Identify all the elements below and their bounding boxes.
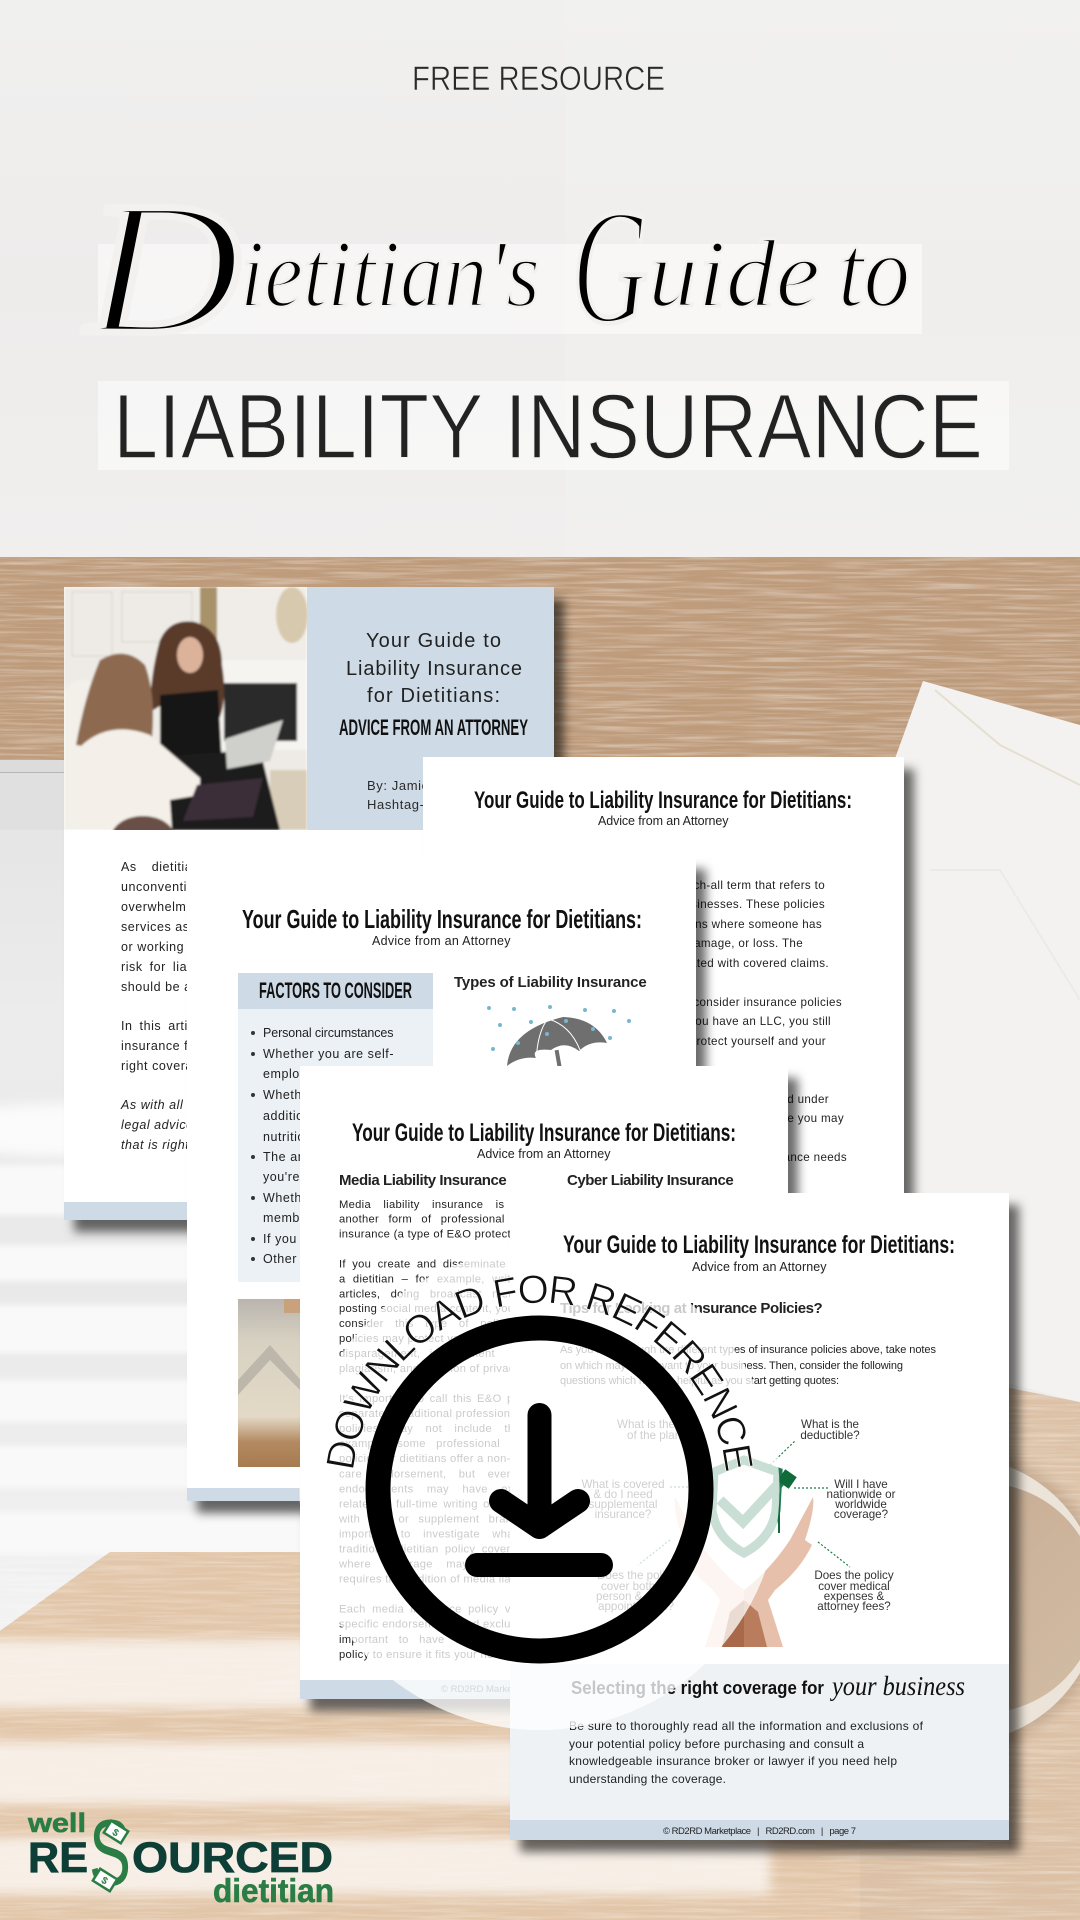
page 4 footer <box>300 1680 788 1699</box>
question callouts around the shield: Will I have <box>834 1478 888 1491</box>
panel: page 3 factors to consider <box>187 857 696 1501</box>
factors bullet list: If you <box>263 1232 297 1246</box>
question callouts around the shield: Does the policy <box>814 1569 894 1582</box>
page 2 body text: associated with covered claims. <box>655 957 829 970</box>
media liability column: traditional dietitian policy covers, <box>339 1544 520 1556</box>
logo: well resourced dietitian: RE <box>28 1834 88 1882</box>
question callouts around the shield: & do I need <box>593 1488 653 1501</box>
media liability column: disparagement, infringement <box>339 1348 495 1360</box>
page 1 intro text: In this article <box>121 1019 205 1033</box>
page 4 heading <box>352 1119 736 1161</box>
page 2 body text: damage, or loss. The <box>687 937 803 950</box>
factors bullet list: additional <box>263 1109 322 1123</box>
tips intro text: questions which may be helpful as you start getting quotes: <box>560 1375 839 1387</box>
media liability column: where coverage may be lacking <box>338 1559 545 1571</box>
tips intro text: on which may be relevant to your business. Then, consider the following <box>560 1360 903 1372</box>
media liability column: related to full-time writing or <box>339 1499 494 1511</box>
cyber liability heading: Cyber Liability Insurance <box>567 1172 734 1189</box>
media liability column: important to investigate what <box>339 1529 518 1541</box>
factors heading: FACTORS TO CONSIDER <box>259 978 412 1003</box>
media liability column: Media Liability Insurance <box>339 1172 507 1189</box>
page 3 heading <box>242 904 642 948</box>
media liability column: insurance (a type of E&O protection) <box>339 1228 531 1240</box>
page 2 body text: situations where someone has <box>656 918 822 931</box>
curved label: download for reference: DOWNLOAD FOR REFERENCE <box>326 1276 754 1472</box>
page 1 intro text: insurance for <box>121 1039 200 1053</box>
page 5 footer <box>510 1820 1009 1840</box>
question callouts around the shield: nationwide or <box>827 1488 896 1501</box>
cover byline: By: Jamie <box>367 778 429 793</box>
page 2 body text: insurance needs <box>757 1151 847 1164</box>
label: free resource: FREE RESOURCE <box>412 60 665 98</box>
media liability column: policies may not include this. <box>339 1423 526 1435</box>
icon: bottom banknote: $ <box>99 1875 110 1888</box>
title block <box>83 60 1009 478</box>
question callouts around the shield: insurance? <box>595 1508 652 1521</box>
factors bullet list <box>251 1026 394 1266</box>
coverage body text: understanding the coverage. <box>569 1772 726 1786</box>
factors bullet list: Whether you are self- <box>263 1047 394 1061</box>
page 5 heading: Advice from an Attorney <box>692 1260 827 1274</box>
page 1 intro text: As dietitians <box>121 860 207 874</box>
page 2 body text: e you may <box>787 1112 844 1125</box>
title script: Dietitian's Guide to: ietitian's <box>240 221 540 327</box>
factors bullet list: Whether <box>263 1088 314 1102</box>
photo: two women consulting <box>64 587 307 830</box>
page 3 footer band <box>187 1488 696 1501</box>
question callouts around the shield: expenses & <box>824 1590 885 1603</box>
media liability column: with and or supplement brand <box>338 1514 519 1526</box>
coverage body text: knowledgeable insurance broker or lawyer if you need help <box>569 1754 897 1768</box>
media liability column: separately; traditional professional <box>339 1408 520 1420</box>
media liability column: plagiarism, and invasion of privacy. <box>339 1363 523 1375</box>
page 2 heading <box>474 787 852 828</box>
media liability column: requires the addition of media liability <box>339 1574 535 1586</box>
icon: bottom banknote <box>93 1869 117 1891</box>
question callouts around the shield: cover both <box>601 1580 655 1593</box>
tips intro text <box>560 1344 936 1387</box>
page 1 intro text: should be at <box>121 980 196 994</box>
coverage heading <box>571 1671 965 1701</box>
page 1 intro text: risk for liability <box>121 960 216 974</box>
media liability column: policies may protect you <box>339 1333 466 1345</box>
page 1 intro text: that is right for <box>121 1138 210 1152</box>
icon: umbrella in rain <box>487 1005 631 1068</box>
coverage heading: Selecting the right coverage for <box>571 1678 824 1698</box>
media liability column: another form of professional liability <box>339 1214 550 1226</box>
icon: top banknote: $ <box>110 1827 121 1840</box>
page 2 body text: protect yourself and your <box>690 1035 826 1048</box>
cover title text: Your Guide to <box>366 630 501 652</box>
page 4 footer: © RD2RD Marketplace <box>441 1684 538 1695</box>
page 2 body text <box>655 879 847 1164</box>
title script: Dietitian's Guide to: G <box>572 175 648 358</box>
page 2 body text: you have an LLC, you still <box>689 1015 831 1028</box>
page 1 intro text: right coverage <box>121 1059 208 1073</box>
media liability column: consider this type of policy. <box>339 1318 513 1330</box>
translucent white disc behind download icon <box>300 1250 780 1730</box>
illustration: hands holding shield <box>675 1460 813 1647</box>
title script: Dietitian's Guide to: uide <box>648 221 820 327</box>
media liability column: articles, doing broadcast media, <box>339 1289 528 1301</box>
media liability column: a dietitian – for example, writing <box>339 1274 527 1286</box>
media liability column: endorsements may have exclusions <box>339 1484 557 1496</box>
panel: page 4 media and cyber liability <box>300 1066 788 1699</box>
question callouts around the shield: supplemental <box>589 1498 657 1511</box>
cover byline <box>367 778 459 812</box>
icon: top banknote <box>104 1821 128 1843</box>
media liability column: If you create and disseminate content <box>339 1258 552 1270</box>
page 2 body text: d under <box>787 1093 829 1106</box>
page 4 heading: Your Guide to Liability Insurance for Dietitians: <box>352 1119 736 1147</box>
question callouts around the shield: appointments? <box>598 1600 675 1613</box>
title script: Dietitian's Guide to: D <box>83 164 241 374</box>
question callouts around the shield: cover medical <box>818 1580 890 1593</box>
question callouts around the shield: deductible? <box>800 1429 860 1442</box>
tips heading: Tips for Looking at Insurance Policies? <box>560 1300 823 1317</box>
coverage body text <box>569 1719 924 1786</box>
page 5 footer: © RD2RD Marketplace | RD2RD.com | page 7 <box>663 1826 856 1837</box>
title: LIABILITY INSURANCE: LIABILITY INSURANCE <box>113 376 983 478</box>
page 1 intro text: services as a <box>121 920 201 934</box>
media liability column: posting social media content, you should <box>339 1303 553 1315</box>
page 2 body text: businesses. These policies <box>678 898 825 911</box>
question callouts around the shield <box>581 1418 896 1613</box>
page 3 heading: Advice from an Attorney <box>372 934 511 948</box>
photo: paper and desk <box>238 1299 310 1467</box>
question callouts around the shield: coverage? <box>834 1508 889 1521</box>
page 1 footer band <box>64 1202 554 1220</box>
media liability column: specific endorsements and exclusions <box>339 1619 538 1631</box>
logo: well resourced dietitian <box>27 1800 334 1909</box>
page 2 heading: Your Guide to Liability Insurance for Dietitians: <box>474 787 852 814</box>
page 3 heading: Your Guide to Liability Insurance for Dietitians: <box>242 904 642 934</box>
page 2 heading: Advice from an Attorney <box>598 814 729 828</box>
media liability column: policy to ensure it fits your needs. <box>339 1649 516 1661</box>
panel: page 5 tips for insurance policies <box>510 1193 1009 1840</box>
title script backdrop <box>98 244 922 334</box>
cover byline: Hashtag-Legal <box>367 797 459 812</box>
media liability column: care endorsement, but even <box>339 1468 513 1480</box>
tips intro text: As you look through the different types of insurance policies above, take notes <box>560 1344 936 1356</box>
panel: blue cover title <box>307 587 554 830</box>
page 1 intro text: overwhelming <box>121 900 205 914</box>
page 1 intro text: legal advice. <box>121 1118 198 1132</box>
logo: well resourced dietitian: OURCED <box>132 1834 333 1882</box>
coverage body text: Be sure to thoroughly read all the information and exclusions of <box>569 1719 924 1733</box>
factors bullet list: Other <box>263 1252 297 1266</box>
media liability column: policies for dietitians offer a non-patient <box>339 1453 547 1465</box>
icon: download arrow in circle <box>378 1328 701 1651</box>
factors bullet list: employed <box>263 1067 322 1081</box>
page 1 intro text: or working at <box>121 940 200 954</box>
cover title text: Liability Insurance <box>346 658 522 680</box>
page 5 heading <box>563 1231 955 1274</box>
factors bullet list: nutrition <box>263 1130 312 1144</box>
page 1 intro text <box>120 860 216 1152</box>
page 4 heading: Advice from an Attorney <box>477 1147 611 1161</box>
factors bullet list: you're <box>263 1170 300 1184</box>
question callouts around the shield: attorney fees? <box>817 1600 891 1613</box>
question callouts around the shield: Does the policy <box>597 1569 676 1582</box>
question callouts around the shield: person & <box>596 1590 643 1603</box>
question callouts around the shield: worldwide <box>834 1498 887 1511</box>
media liability column: Each media insurance policy varies <box>339 1604 537 1616</box>
title script: Dietitian's Guide to <box>83 164 910 374</box>
question callouts around the shield: What is covered <box>581 1478 665 1491</box>
media liability column: It's important to call this E&O policy <box>339 1393 537 1405</box>
cover title text: ADVICE FROM AN ATTORNEY <box>339 715 528 740</box>
question callouts around the shield: What is the <box>801 1418 859 1431</box>
page 1 intro text: unconventional <box>121 880 213 894</box>
logo: well resourced dietitian: S <box>89 1800 131 1905</box>
panel: page 1 guide cover <box>64 587 554 1220</box>
factors bullet list: The amount <box>263 1150 335 1164</box>
dotted arrows <box>638 1441 850 1567</box>
page 2 body text: a catch-all term that refers to <box>667 879 825 892</box>
coverage heading: your business <box>829 1671 965 1701</box>
media liability column <box>338 1172 557 1661</box>
factors bullet list: Whether <box>263 1191 314 1205</box>
question callouts around the shield: What is the cost <box>617 1418 700 1431</box>
media liability column: Media liability insurance is actually <box>339 1199 557 1211</box>
page 1 intro text: As with all a <box>120 1098 195 1112</box>
coverage body text: your potential policy before purchasing and consult a <box>569 1737 864 1751</box>
question callouts around the shield: of the plan? <box>627 1429 688 1442</box>
media liability column: example, some professional liability <box>339 1438 547 1450</box>
media liability column: important to have a <box>339 1634 462 1646</box>
panel: page 2 liability overview <box>423 757 904 1317</box>
title script: Dietitian's Guide to: to <box>838 214 910 330</box>
title bold backdrop <box>98 381 1009 470</box>
types of liability heading: Types of Liability Insurance <box>454 974 647 991</box>
cover title text <box>339 630 528 740</box>
factors bullet list: member <box>263 1211 312 1225</box>
logo: well resourced dietitian: well <box>27 1808 86 1838</box>
factors box <box>238 973 433 1282</box>
logo: well resourced dietitian: dietitian <box>213 1872 334 1909</box>
panel: selecting the right coverage <box>510 1664 1009 1820</box>
cover title text: for Dietitians: <box>367 685 500 707</box>
factors bullet list: Personal circumstances <box>263 1026 394 1040</box>
page 2 body text: consider insurance policies <box>693 996 842 1009</box>
